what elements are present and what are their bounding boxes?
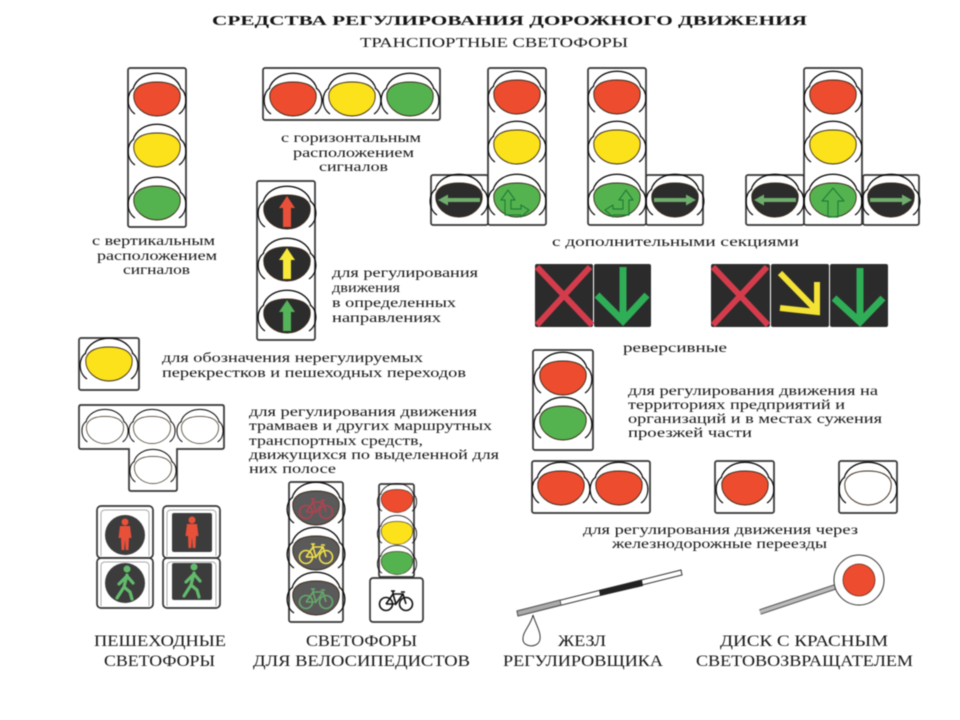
traffic light: flashing yellow: [79, 338, 139, 390]
traffic light: vertical: [128, 68, 186, 227]
caption: flashing yellow: для обозначения нерегулируемых: [162, 351, 423, 366]
caption: disc: СВЕТОВОЗВРАЩАТЕЛЕМ: [696, 653, 913, 670]
caption: pedestrian: СВЕТОФОРЫ: [104, 653, 215, 670]
caption: tram: для регулирования движения: [249, 405, 478, 420]
caption: cyclists: [253, 633, 470, 670]
traffic light: tram T-shape: [79, 405, 224, 491]
caption: tram: транспортных средств,: [249, 434, 423, 449]
caption: disc: [696, 633, 913, 670]
caption: vertical: сигналов: [123, 263, 190, 278]
traffic light: horizontal: [263, 68, 440, 120]
caption: directional: [332, 266, 479, 326]
caption: tram: движущихся по выделенной для: [249, 448, 500, 463]
caption: railway: для регулирования движения через: [583, 523, 859, 538]
caption: vertical: расположением: [97, 249, 217, 264]
traffic light: two lenses: [533, 350, 593, 450]
caption: baton: ЖЕЗЛ: [558, 633, 606, 650]
caption: baton: [503, 633, 664, 670]
caption: directional: направлениях: [332, 311, 441, 326]
caption: railway: [583, 523, 859, 552]
pedestrian light: round: [97, 506, 153, 608]
traffic light: two additional sections: [746, 68, 920, 225]
traffic baton: [517, 570, 682, 646]
caption: horizontal: с горизонтальным: [281, 131, 421, 146]
caption: disc: ДИСК С КРАСНЫМ: [720, 633, 888, 650]
caption: cyclists: СВЕТОФОРЫ: [306, 633, 417, 650]
caption: flashing yellow: перекрестков и пешеходных переходов: [162, 366, 466, 381]
caption: additional sections: с дополнительными секциями: [552, 235, 800, 250]
caption: railway: железнодорожные переезды: [611, 537, 828, 552]
caption: vertical: [92, 234, 217, 278]
caption: enterprises: территориях предприятий и: [628, 398, 846, 413]
caption: reversible: реверсивные: [623, 341, 727, 356]
caption: tram: них полосе: [249, 462, 336, 477]
traffic light: additional right section: [588, 68, 704, 225]
caption: enterprises: [628, 384, 883, 441]
caption: directional: для регулирования: [332, 266, 479, 281]
caption: directional: движения: [332, 281, 401, 296]
traffic light: directional arrows: [257, 181, 316, 340]
caption: baton: РЕГУЛИРОВЩИКА: [503, 653, 664, 670]
railway signal: two red: [532, 461, 650, 513]
caption: horizontal: расположением: [293, 146, 414, 161]
caption: horizontal: сигналов: [319, 160, 388, 175]
caption: tram: трамваев и других маршрутных: [249, 419, 492, 434]
subtitle: ТРАНСПОРТНЫЕ СВЕТОФОРЫ: [360, 36, 628, 51]
caption: enterprises: для регулирования движения на: [628, 384, 879, 399]
traffic light: additional left section: [430, 68, 546, 225]
railway signal: white: [839, 461, 897, 513]
caption: directional: в определенных: [332, 296, 456, 311]
title: СРЕДСТВА РЕГУЛИРОВАНИЯ ДОРОЖНОГО ДВИЖЕНИЯ: [212, 14, 807, 29]
caption: enterprises: проезжей части: [628, 426, 753, 441]
signal disc: [760, 555, 884, 612]
caption: vertical: с вертикальным: [92, 234, 215, 249]
reversible signal: two panels: [535, 264, 651, 327]
caption: pedestrian: ПЕШЕХОДНЫЕ: [94, 633, 226, 650]
caption: cyclists: ДЛЯ ВЕЛОСИПЕДИСТОВ: [253, 653, 470, 670]
caption: tram: [249, 405, 500, 477]
railway signal: one red: [715, 461, 774, 513]
bicycle light: small with plate: [370, 483, 423, 622]
reversible signal: three panels: [711, 264, 888, 327]
caption: pedestrian: [94, 633, 226, 670]
bicycle light: three lenses: [287, 482, 345, 622]
caption: enterprises: организаций и в местах сужения: [628, 412, 883, 427]
caption: flashing yellow: [162, 351, 466, 381]
pedestrian light: square: [163, 506, 220, 608]
caption: horizontal: [281, 131, 421, 175]
